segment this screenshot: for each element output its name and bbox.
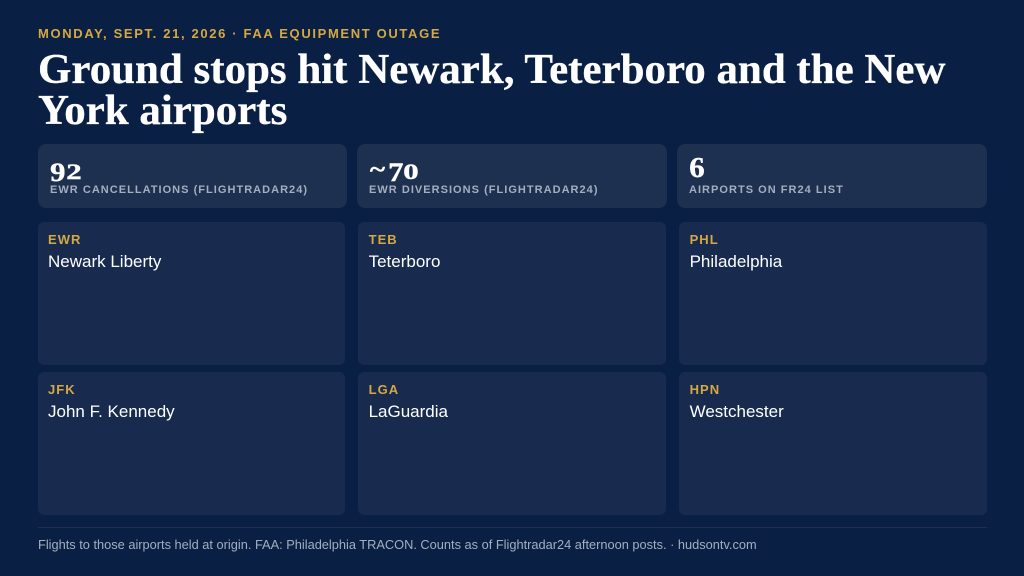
stat: airports on list: 6 [689,152,705,184]
title: Ground stops hit Newark, Teterboro and the New [38,47,946,93]
stat: EWR cancellations: 2 [66,159,82,184]
card: PHL: Philadelphia [690,252,782,271]
card: PHL: PHL [690,232,719,247]
eyebrow: MONDAY, SEPT. 21, 2026 · FAA EQUIPMENT OUTAGE [38,26,441,41]
title: York airports [38,88,287,134]
card: HPN: HPN [690,382,720,397]
card: HPN [679,372,987,515]
stat: airports on list [677,144,987,208]
card: EWR: EWR [48,232,81,247]
card: HPN: Westchester [690,402,784,421]
card: TEB [358,222,666,365]
card: LGA [358,372,666,515]
stat: EWR diversions: 0 [403,159,419,184]
card: JFK: JFK [48,382,76,397]
stat: EWR diversions: 7 [388,158,403,186]
stat: airports on list: AIRPORTS ON FR24 LIST [689,184,844,196]
card: TEB: TEB [369,232,398,247]
title [38,47,946,134]
card: JFK: John F. Kennedy [48,402,175,421]
card: EWR [38,222,345,365]
footer note: Flights to those airports held at origin. FAA: Philadelphia TRACON. Counts as of Flightradar24 afternoon posts. · hudsontv.com [38,537,757,552]
card: LGA: LaGuardia [369,402,448,421]
stat: EWR diversions: ~ [370,157,385,183]
stat: EWR cancellations: EWR CANCELLATIONS (FLIGHTRADAR24) [50,184,308,196]
card: LGA: LGA [369,382,399,397]
stat: EWR cancellations [38,144,347,208]
stat: EWR diversions [357,144,667,208]
stat: EWR cancellations: 9 [50,158,65,186]
card: PHL [679,222,987,365]
card: JFK [38,372,345,515]
stat: EWR diversions: EWR DIVERSIONS (FLIGHTRADAR24) [369,184,599,196]
card: TEB: Teterboro [369,252,440,271]
card: EWR: Newark Liberty [48,252,161,271]
